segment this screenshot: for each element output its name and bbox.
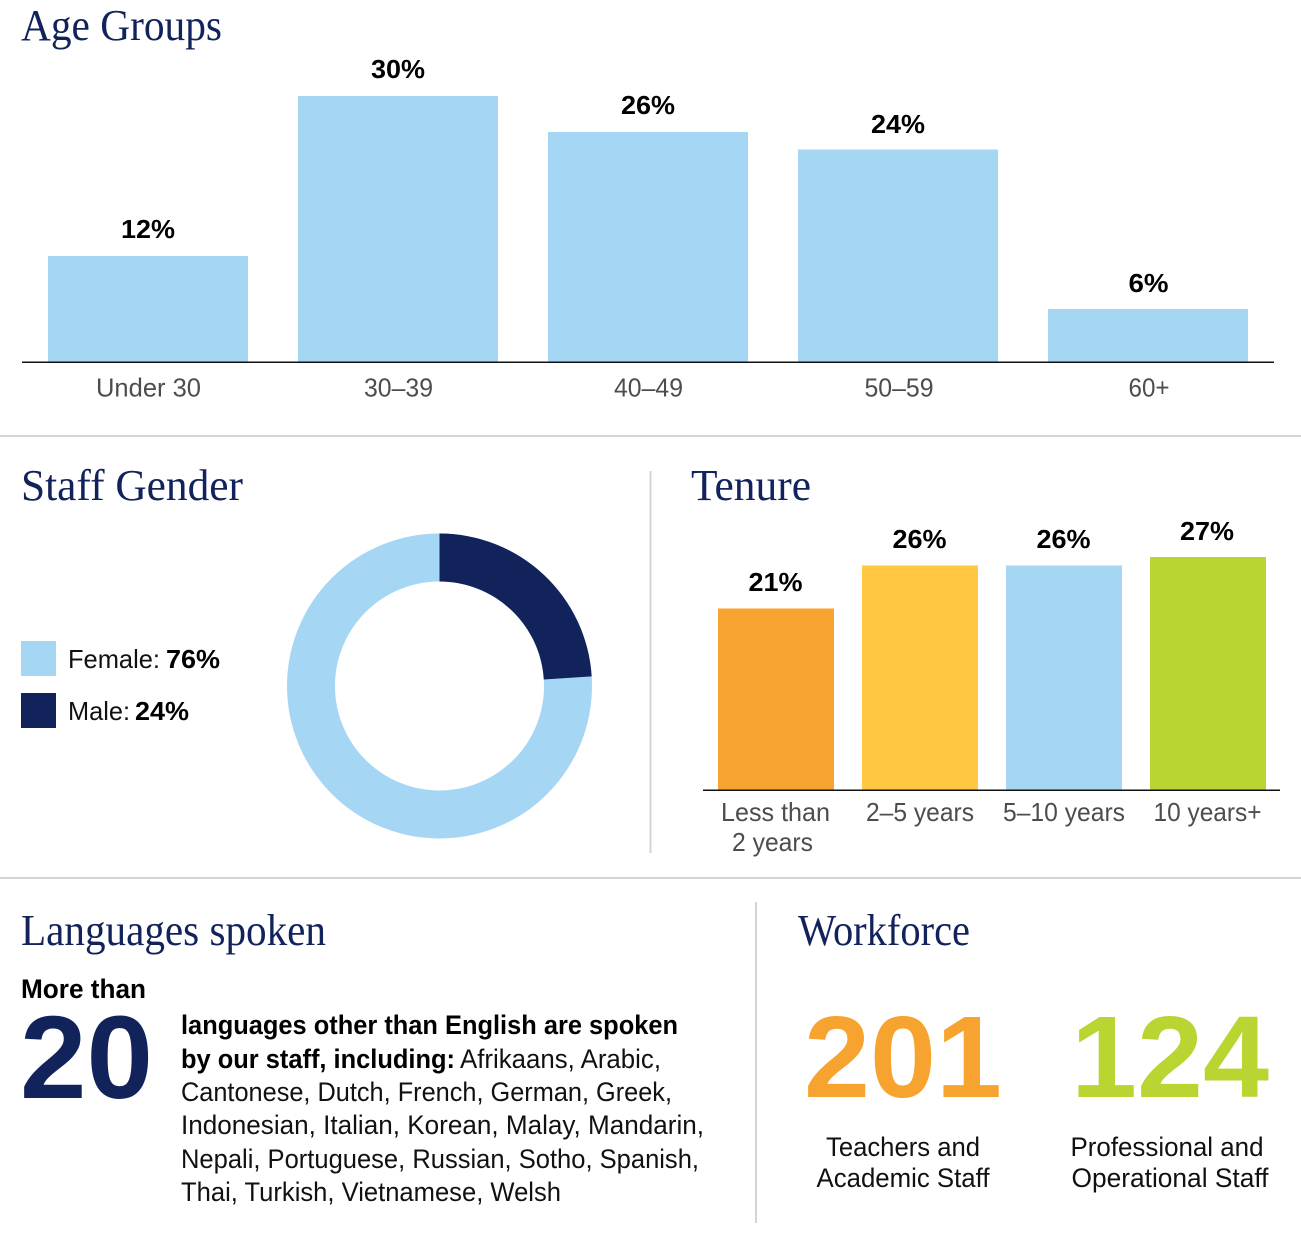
- bar chart: age groups: 26%: [621, 90, 675, 120]
- bar chart: tenure: 21%: [748, 567, 802, 597]
- text: languages list: Cantonese, Dutch, French, German, Greek,: [181, 1077, 672, 1107]
- panel: age groups: [21, 1, 1274, 402]
- heading: Languages spoken: Languages spoken: [21, 906, 326, 955]
- text: languages list: Nepali, Portuguese, Russian, Sotho, Spanish,: [181, 1144, 699, 1174]
- legend: male: [21, 693, 189, 728]
- text: languages list: [181, 1010, 704, 1207]
- bar chart: tenure: 2–5 years: [866, 797, 974, 827]
- stat: teachers and academic staff: Teachers and: [826, 1132, 980, 1162]
- bar chart: age groups: [22, 54, 1274, 402]
- heading: Staff Gender: Staff Gender: [21, 461, 243, 510]
- bar chart: tenure: 2 years: [732, 827, 813, 857]
- legend: female: 76%: [166, 644, 220, 674]
- bar chart: age groups: 50–59: [864, 372, 934, 402]
- stat: professional and operational staff: Operational Staff: [1072, 1163, 1269, 1193]
- big number: 20: 20: [20, 992, 153, 1124]
- legend: male: Male:: [68, 696, 130, 726]
- stat: teachers and academic staff: [804, 992, 1002, 1193]
- legend: male: 24%: [135, 696, 189, 726]
- panel: workforce: [798, 906, 1269, 1193]
- bar chart: age groups: Under 30: [96, 372, 201, 402]
- bar chart: age groups: 12%: [121, 214, 175, 244]
- bar chart: age groups: 24%: [871, 109, 925, 139]
- text: languages list: Indonesian, Italian, Korean, Malay, Mandarin,: [181, 1110, 704, 1140]
- text: languages list: Afrikaans, Arabic,: [460, 1044, 661, 1074]
- heading: Workforce: Workforce: [798, 906, 970, 955]
- legend: female: Female:: [68, 644, 160, 674]
- text: More than: More than: [21, 974, 146, 1004]
- bar chart: tenure: 26%: [892, 524, 946, 554]
- bar chart: age groups: 60+: [1128, 372, 1170, 402]
- bar chart: age groups: 30–39: [364, 372, 433, 402]
- legend: female: [21, 641, 220, 676]
- text: languages list: languages other than English are spoken: [181, 1010, 678, 1040]
- stat: professional and operational staff: [1070, 992, 1269, 1193]
- bar chart: tenure: 26%: [1036, 524, 1090, 554]
- stat: professional and operational staff: 124: [1071, 992, 1269, 1122]
- stat: teachers and academic staff: Academic Staff: [816, 1163, 990, 1193]
- heading: Age Groups: Age Groups: [21, 1, 222, 50]
- bar chart: tenure: 27%: [1180, 516, 1234, 546]
- panel: languages spoken: [20, 906, 704, 1207]
- bar chart: tenure: [703, 516, 1280, 857]
- bar chart: age groups: 40–49: [614, 372, 683, 402]
- bar chart: age groups: 6%: [1128, 268, 1168, 298]
- stat: teachers and academic staff: 201: [804, 992, 1002, 1122]
- bar chart: age groups: 30%: [371, 54, 425, 84]
- bar chart: tenure: Less than: [721, 797, 830, 827]
- text: languages list: Thai, Turkish, Vietnamese, Welsh: [181, 1177, 561, 1207]
- bar chart: tenure: 10 years+: [1154, 797, 1262, 827]
- stat: professional and operational staff: Professional and: [1070, 1132, 1264, 1162]
- panel: staff gender: [21, 461, 592, 814]
- donut chart: gender split: [311, 534, 592, 814]
- heading: Tenure: Tenure: [691, 461, 811, 510]
- text: languages list: by our staff, including:: [181, 1044, 455, 1074]
- bar chart: tenure: 5–10 years: [1003, 797, 1125, 827]
- panel: tenure: [691, 461, 1280, 857]
